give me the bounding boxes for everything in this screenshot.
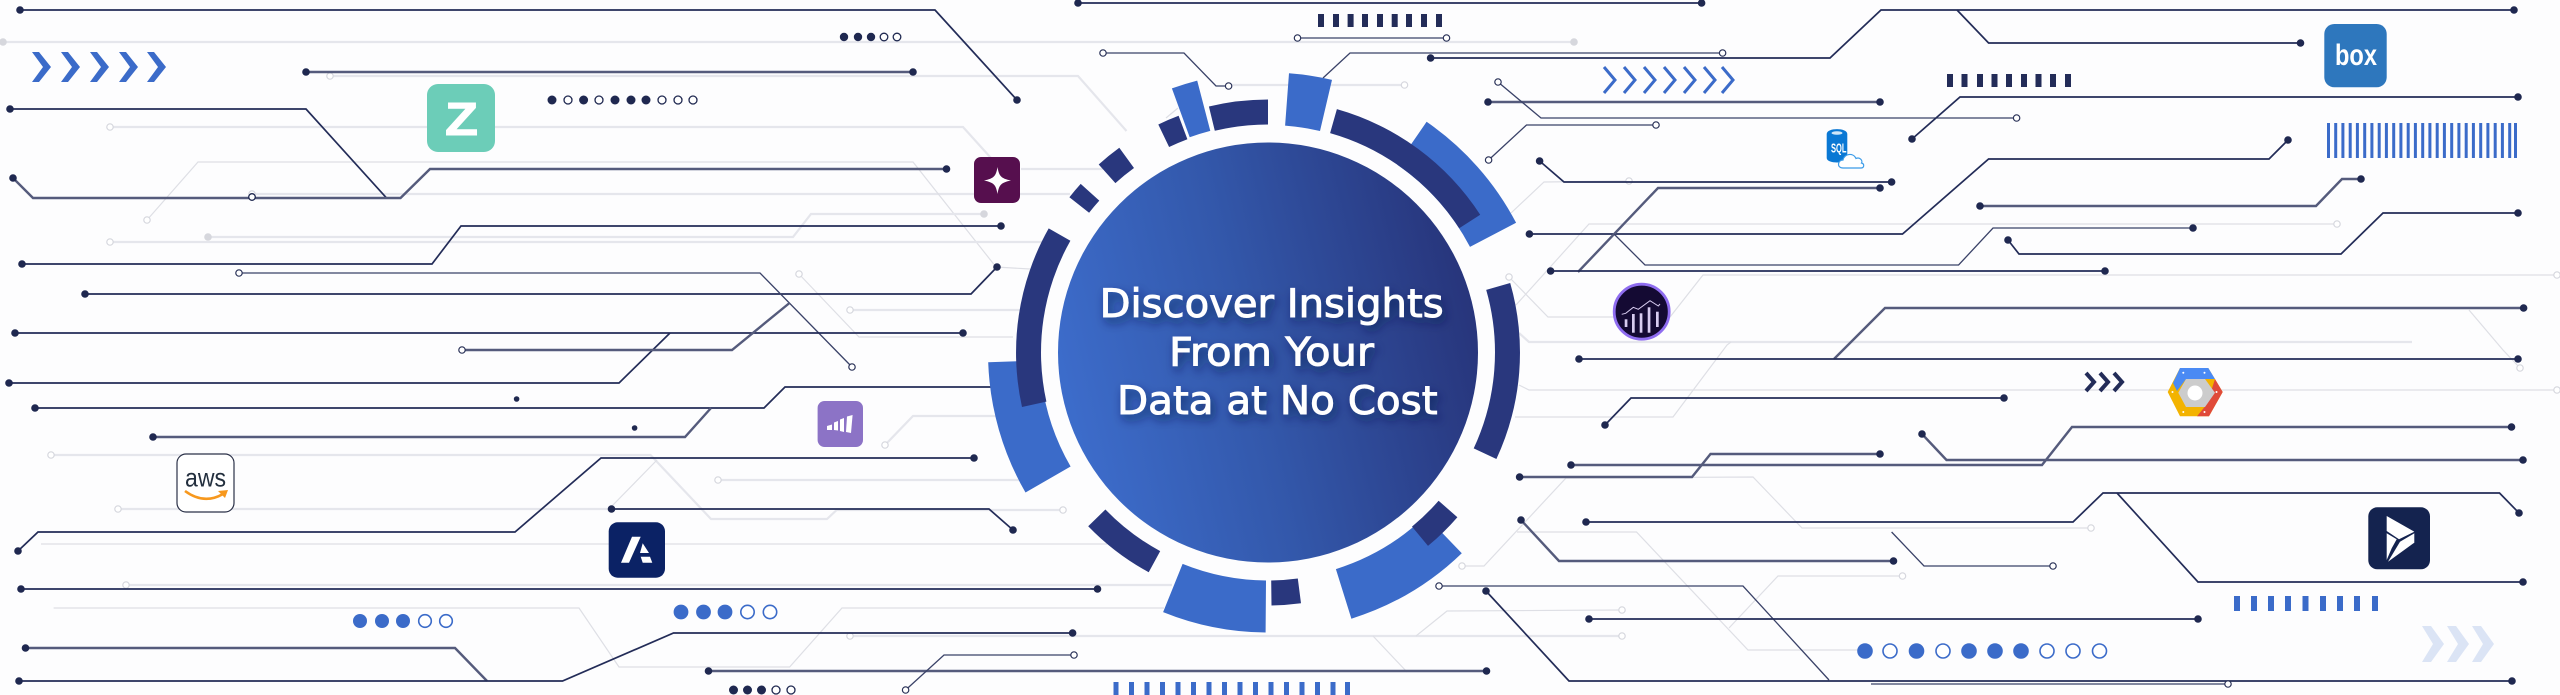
icon: AWS logo: aws: [185, 463, 226, 493]
icon: Google Cloud hexagon: [2168, 368, 2223, 416]
icon: purple sparkle logo: [974, 157, 1020, 203]
dot row: dark five, bottom: [729, 686, 795, 694]
title: [1100, 282, 1444, 424]
dark circuit traces, left side: [9, 10, 1486, 690]
title: Discover Insights: [1100, 282, 1444, 327]
bars: blue ticks bottom centre: [1114, 682, 1350, 695]
title: Data at No Cost: [1117, 379, 1438, 424]
title: From Your: [1169, 330, 1375, 376]
icon: Anaplan logo: [609, 522, 665, 578]
icon: thin blue chevrons top centre-right: [1604, 67, 1733, 93]
icon: Z logo: Z: [445, 93, 478, 145]
icon: Adobe Analytics logo: [1614, 284, 1669, 339]
dot row: dark five, top left: [840, 33, 901, 41]
icon: SQL cloud database: [1827, 129, 1864, 168]
icon: SQL cloud database: SQL: [1831, 141, 1847, 155]
ring: blue segments: [988, 73, 1516, 633]
central hub: [988, 73, 1520, 633]
icon: Marketo logo: [818, 401, 863, 447]
dark circuit traces, right side: [1078, 3, 2524, 684]
dot row: dark ten, next to Z logo: [548, 96, 697, 104]
icon: Box logo: box: [2335, 39, 2377, 72]
icon: blue chevrons top left: [32, 52, 166, 82]
bars: blue stripes top right: [2327, 123, 2517, 158]
central gradient circle: [1058, 142, 1478, 562]
bars: dark ticks top right: [1947, 74, 2071, 87]
icon: AWS logo: [177, 454, 234, 512]
bars: dark ticks top centre: [1318, 14, 1442, 27]
dot row: blue five, bottom centre-left: [674, 605, 777, 619]
icon: dark chevrons near cloud logo: [2086, 373, 2122, 391]
icon: Box logo: [2324, 24, 2387, 87]
icon: Z logo: [427, 84, 495, 152]
dot row: blue ten, bottom right: [1857, 643, 2106, 659]
icon: Dynamics logo: [2368, 507, 2430, 569]
bars: blue ticks bottom right: [2234, 596, 2378, 611]
ring: dark segments: [1016, 100, 1520, 606]
icon: pale chevrons bottom right: [2422, 626, 2494, 662]
dot row: blue five, bottom left: [353, 614, 452, 628]
